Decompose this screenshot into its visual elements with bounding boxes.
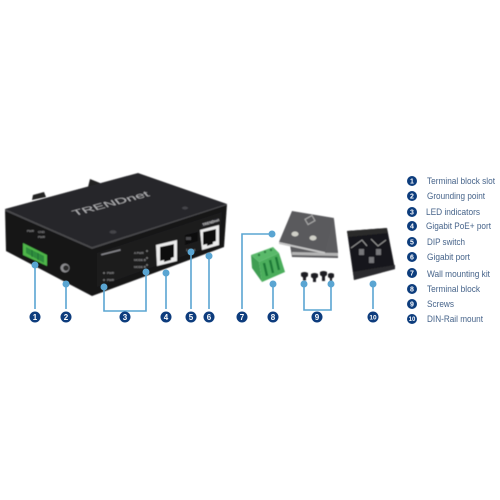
number badges under the product: 3 bbox=[123, 313, 128, 322]
top surface bbox=[5, 173, 227, 248]
legend: 10 bbox=[409, 317, 416, 323]
terminal block bbox=[251, 247, 285, 282]
stud left bbox=[292, 232, 298, 236]
screw hole right bbox=[182, 206, 188, 210]
legend: Wall mounting kit bbox=[427, 269, 490, 280]
front plate bbox=[279, 211, 334, 252]
back plate edge bbox=[292, 252, 338, 256]
device: industrial PoE injector: GND bbox=[38, 230, 46, 234]
legend: 2 bbox=[410, 194, 414, 200]
din clip right bbox=[88, 179, 100, 187]
DIN-rail mount bbox=[347, 228, 395, 280]
legend: Screws bbox=[427, 299, 454, 310]
number badges under the product: 10 bbox=[369, 314, 377, 322]
logo on top: TRENDnet bbox=[70, 189, 153, 218]
terminal block slot bbox=[23, 243, 47, 266]
front plate edge bbox=[279, 242, 325, 254]
device: industrial PoE injector: 1 2 3 4 bbox=[186, 248, 196, 252]
legend: 8 bbox=[410, 286, 414, 294]
number badges under the product: 7 bbox=[240, 313, 245, 322]
number badges under the product: 6 bbox=[207, 313, 212, 322]
device: industrial PoE injector: PWR bbox=[107, 278, 115, 282]
LED labels bbox=[101, 249, 121, 255]
legend: 7 bbox=[410, 270, 414, 278]
legend: Gigabit port bbox=[427, 252, 470, 263]
back plate bbox=[290, 219, 338, 258]
legend bbox=[407, 176, 495, 325]
legend: 5 bbox=[410, 240, 414, 246]
DIP switch bbox=[185, 232, 198, 245]
number badges under the product: 2 bbox=[64, 313, 69, 322]
screw hole front bbox=[110, 230, 116, 234]
terminal labels: PWR bbox=[27, 229, 35, 233]
legend: 3 bbox=[410, 210, 414, 216]
screws bbox=[301, 271, 334, 282]
din clip left bbox=[32, 192, 46, 200]
number badges under the product: 9 bbox=[315, 313, 320, 322]
number badges under the product: 5 bbox=[189, 313, 194, 322]
device: industrial PoE injector: MODE B bbox=[134, 258, 146, 262]
legend: DIP switch bbox=[427, 237, 465, 248]
legend: LED indicators bbox=[426, 207, 480, 218]
legend: Terminal block bbox=[427, 284, 480, 295]
device: industrial PoE injector bbox=[5, 173, 227, 296]
number badges under the product: 4 bbox=[164, 313, 169, 322]
number badges under the product bbox=[30, 312, 378, 322]
number badges under the product: 1 bbox=[33, 313, 38, 322]
legend: DIN-Rail mount bbox=[427, 314, 483, 325]
legend: 1 bbox=[410, 178, 414, 186]
right face bbox=[92, 204, 227, 296]
gigabit port bbox=[200, 225, 219, 250]
legend: Gigabit PoE+ port bbox=[426, 221, 491, 232]
front inset panel bbox=[97, 212, 222, 287]
callout lines and dots bbox=[32, 230, 376, 311]
keyhole mark bbox=[305, 215, 315, 225]
legend: Grounding point bbox=[427, 191, 485, 202]
left face bbox=[5, 209, 92, 296]
stud right bbox=[310, 236, 316, 240]
device: industrial PoE injector: TRENDnet bbox=[202, 218, 221, 227]
device: industrial PoE injector: PWR bbox=[107, 271, 115, 275]
device: industrial PoE injector: PWR bbox=[38, 235, 46, 239]
legend: 9 bbox=[410, 302, 414, 308]
small logo bbox=[202, 218, 218, 227]
PoE+ port bbox=[156, 240, 177, 266]
legend: 6 bbox=[410, 254, 414, 262]
wall mounting kit bbox=[279, 211, 338, 258]
device: industrial PoE injector: A PWR bbox=[134, 251, 145, 255]
device: industrial PoE injector: MODE B bbox=[134, 265, 146, 269]
number badges under the product: 8 bbox=[271, 313, 276, 322]
grounding point bbox=[60, 264, 70, 272]
top edge highlight bbox=[5, 204, 227, 249]
legend: 4 bbox=[410, 224, 414, 230]
